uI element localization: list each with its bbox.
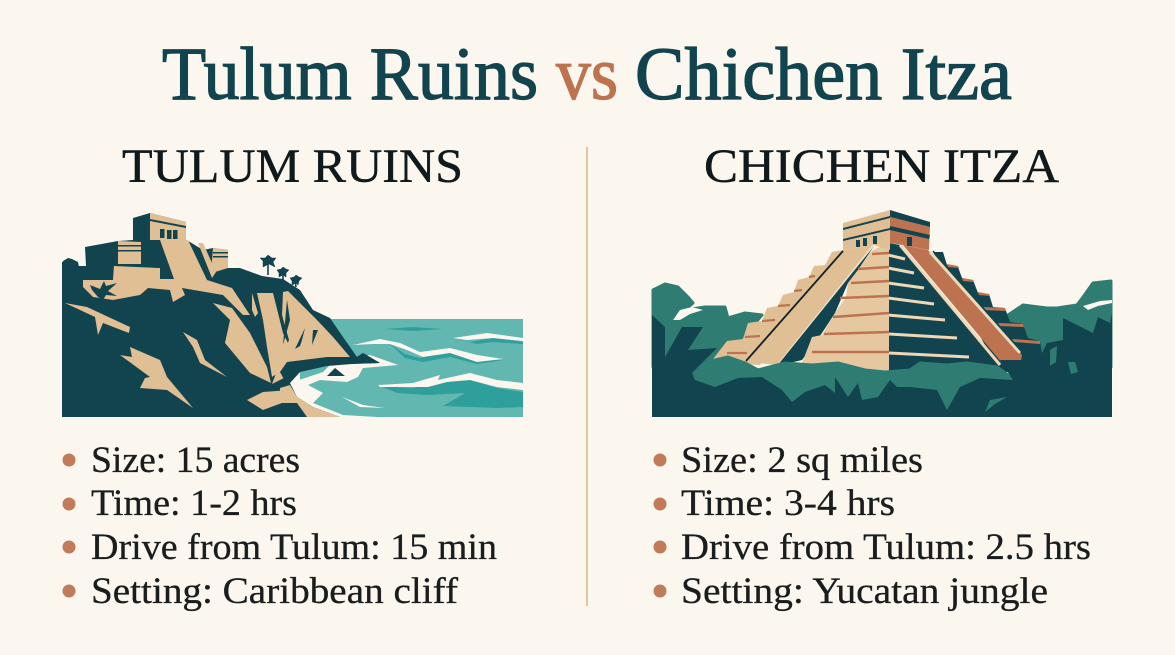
pyramid shaded side	[777, 246, 874, 366]
title: Chichen Itza	[635, 33, 1012, 116]
right face stripes	[888, 245, 1000, 365]
temple details	[114, 219, 228, 268]
front face stripes	[812, 253, 889, 352]
pyramid right face	[889, 243, 1005, 373]
foliage leaves	[985, 346, 1078, 412]
heading: Tulum Ruins: TULUM RUINS	[122, 140, 463, 193]
temple stones	[83, 213, 250, 315]
rust stairway	[903, 245, 1022, 368]
palm trees	[260, 255, 302, 287]
fact: setting: Setting: Caribbean cliff	[91, 571, 459, 612]
fact: time: Time: 1-2 hrs	[91, 483, 297, 524]
fact: drive: Drive from Tulum: 15 min	[91, 527, 497, 568]
heading: Chichen Itza: CHICHEN ITZA	[704, 140, 1059, 193]
pyramid front face	[802, 243, 889, 375]
tree gaps	[673, 300, 1112, 320]
dark foreground foliage	[652, 313, 1112, 417]
agave and shrub	[63, 258, 117, 300]
illustration: Chichen Itza pyramid and jungle	[652, 210, 1112, 417]
pyramid right tiers	[933, 252, 1045, 372]
illustration: Tulum cliff and sea	[62, 213, 523, 417]
sea	[300, 319, 523, 417]
title	[162, 33, 1012, 116]
back jungle	[653, 281, 1111, 373]
cliff silhouette	[62, 213, 380, 417]
cliff cracks	[280, 300, 380, 383]
fact: size: Size: 2 sq miles	[681, 440, 923, 481]
pyramid left tiers	[710, 250, 843, 365]
fact: setting: Setting: Yucatan jungle	[681, 571, 1048, 612]
list: Tulum facts	[62, 440, 497, 612]
temple on top	[843, 210, 930, 250]
rock faces	[65, 291, 350, 417]
title: vs	[556, 33, 618, 116]
front jungle	[692, 357, 1018, 415]
fact: size: Size: 15 acres	[91, 440, 300, 481]
title: Tulum Ruins	[162, 33, 538, 116]
fact: time: Time: 3-4 hrs	[681, 483, 895, 524]
list: Chichen Itza facts	[654, 440, 1091, 612]
shore foam	[290, 355, 398, 417]
waves	[342, 327, 523, 408]
main stairway	[746, 245, 873, 365]
left tier stripes	[727, 276, 815, 353]
fact: drive: Drive from Tulum: 2.5 hrs	[681, 527, 1091, 568]
center divider	[586, 147, 588, 606]
